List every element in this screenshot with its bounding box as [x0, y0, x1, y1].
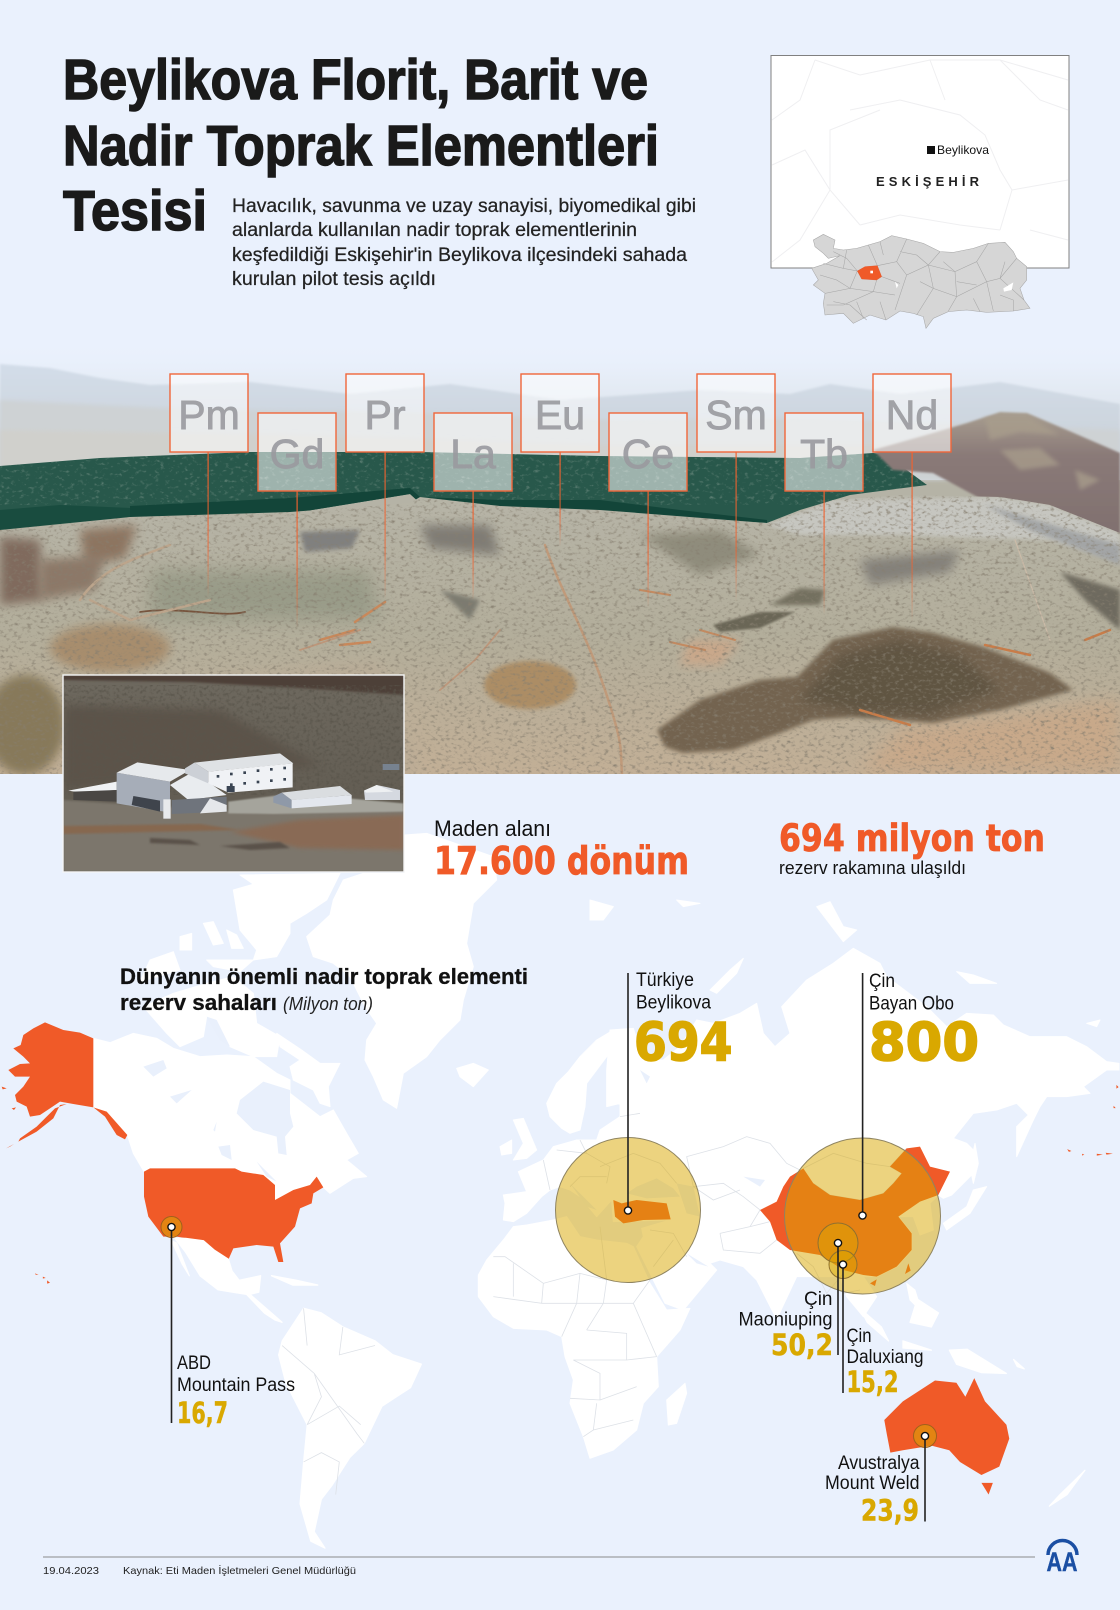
- callout: ABD Mountain Pass: Mountain Pass: [177, 1375, 295, 1396]
- footer: 19.04.2023: [43, 1565, 99, 1577]
- title: Tesisi: [63, 179, 207, 243]
- box: Gd: Gd: [270, 431, 324, 477]
- box: Ce: [609, 413, 687, 491]
- box: Pr: [346, 374, 424, 452]
- callout: Avustralya Mount Weld: Avustralya: [838, 1453, 920, 1474]
- callout: Çin Maoniuping: Maoniuping: [738, 1310, 832, 1330]
- box: Nd: [873, 374, 951, 452]
- stat: Maden alanı: [434, 816, 689, 883]
- title: Nadir Toprak Elementleri: [63, 114, 659, 178]
- callout: Çin Maoniuping: 50,2: [771, 1328, 833, 1362]
- callout: Çin Bayan Obo: 800: [869, 1012, 979, 1074]
- box: Eu: [521, 374, 599, 452]
- box: Pr: Pr: [364, 392, 406, 438]
- intro text: [232, 195, 696, 290]
- callout: Çin Bayan Obo: [859, 971, 979, 1219]
- callout: Çin Bayan Obo: Çin: [869, 971, 895, 992]
- stat: 694 milyon ton: rezerv rakamına ulaşıldı: [779, 858, 966, 878]
- stat: Maden alanı: 17.600 dönüm: [434, 839, 689, 883]
- circle: Mount Weld: [914, 1424, 936, 1448]
- element boxes: [170, 374, 951, 628]
- label: Eskişehir: ESKİŞEHİR: [876, 174, 980, 189]
- callout: Çin Daluxiang: Çin: [846, 1326, 872, 1347]
- inset photo: facility: [63, 675, 404, 872]
- orange erosion streaks and roads: [80, 540, 1110, 774]
- stat: 694 milyon ton: [779, 817, 1045, 878]
- callout: Avustralya Mount Weld: Mount Weld: [825, 1473, 920, 1494]
- box: Gd: [258, 413, 336, 491]
- callout: Çin Daluxiang: [839, 1261, 924, 1399]
- box: La: [434, 413, 512, 491]
- land: Eurasia: [503, 900, 1119, 1319]
- Australia: [884, 1378, 1009, 1495]
- callout: ABD Mountain Pass: [168, 1223, 295, 1430]
- land: North America and Greenland: [2, 833, 497, 1262]
- box: Nd: Nd: [886, 392, 938, 438]
- callout: Çin Maoniuping: Çin: [804, 1289, 832, 1310]
- islands: Southeast Asia and Oceania: [860, 1085, 1119, 1506]
- circle: Daluxiang: [829, 1250, 857, 1278]
- ground speckle: [0, 490, 1120, 774]
- Turkey map: [812, 234, 1030, 328]
- logo: AA: [1046, 1540, 1078, 1577]
- map heading: (Milyon ton): [283, 994, 373, 1014]
- locator map: Eskişehir: [771, 56, 1069, 328]
- intro text: alanlarda kullanılan nadir toprak elementlerinin: [232, 219, 637, 241]
- right mountain: [873, 412, 1120, 535]
- box: La: La: [450, 431, 496, 477]
- callout: Çin Bayan Obo: Bayan Obo: [869, 994, 954, 1014]
- map heading: rezerv sahaları: [120, 990, 277, 1015]
- callout: Çin Daluxiang: 15,2: [846, 1365, 898, 1399]
- box: Ce: Ce: [622, 431, 674, 477]
- brush patches: [0, 537, 43, 605]
- callout: ABD Mountain Pass: 16,7: [177, 1396, 228, 1430]
- box: Sm: Sm: [705, 392, 767, 438]
- China and Turkey fill: [613, 1147, 950, 1286]
- box: Pm: [170, 374, 248, 452]
- land: Europe and Africa: [478, 1030, 690, 1458]
- factory buildings: [68, 753, 403, 819]
- main landscape photo: [0, 340, 1120, 775]
- callout: Çin Maoniuping: [738, 1239, 842, 1362]
- title: Beylikova Florit, Barit ve: [63, 48, 648, 112]
- box: Eu: Eu: [535, 392, 585, 438]
- callout: Türkiye Beylikova: Beylikova: [636, 992, 711, 1014]
- callout: Çin Daluxiang: Daluxiang: [846, 1347, 924, 1368]
- title: [63, 48, 659, 243]
- callout: Avustralya Mount Weld: 23,9: [861, 1494, 919, 1528]
- callout: Türkiye Beylikova: Türkiye: [636, 970, 694, 991]
- logo: AA: AA: [1046, 1547, 1078, 1577]
- box: Sm: [697, 374, 775, 452]
- footer: [43, 1556, 1035, 1577]
- callout: Türkiye Beylikova: 694: [634, 1012, 732, 1074]
- callout: ABD Mountain Pass: ABD: [177, 1353, 211, 1374]
- callout: Türkiye Beylikova: [624, 970, 732, 1214]
- box: Pm: Pm: [178, 392, 240, 438]
- stat: Maden alanı: Maden alanı: [434, 816, 551, 841]
- marker: Beylikova: Beylikova: [937, 143, 989, 157]
- forest: [0, 452, 927, 530]
- circle: Mountain Pass: [161, 1216, 182, 1238]
- land: Mexico, Central and South America: [35, 1238, 421, 1548]
- intro text: Havacılık, savunma ve uzay sanayisi, biyomedikal gibi: [232, 195, 696, 217]
- USA and Alaska: [2, 1022, 323, 1262]
- box: Tb: [785, 413, 863, 491]
- circle: Turkey: [556, 1138, 700, 1282]
- footer: Kaynak: Eti Maden İşletmeleri Genel Müdürlüğü: [123, 1564, 356, 1577]
- intro text: keşfedildiği Eskişehir'in Beylikova ilçesindeki sahada: [232, 244, 687, 266]
- circle: Maoniuping: [818, 1223, 858, 1263]
- map heading: Dünyanın önemli nadir toprak elementi: [120, 964, 528, 989]
- world map: [2, 833, 1119, 1548]
- hills ground: [0, 495, 1120, 774]
- circle: China Bayan Obo: [784, 1138, 940, 1294]
- connector lines: [208, 452, 913, 628]
- distant mountains: [0, 364, 1120, 430]
- box: Tb: Tb: [800, 431, 848, 477]
- intro text: kurulan pilot tesis açıldı: [232, 268, 436, 290]
- callout: Avustralya Mount Weld: [825, 1432, 929, 1528]
- stat: 694 milyon ton: 694 milyon ton: [779, 817, 1045, 860]
- map heading: [120, 964, 528, 1015]
